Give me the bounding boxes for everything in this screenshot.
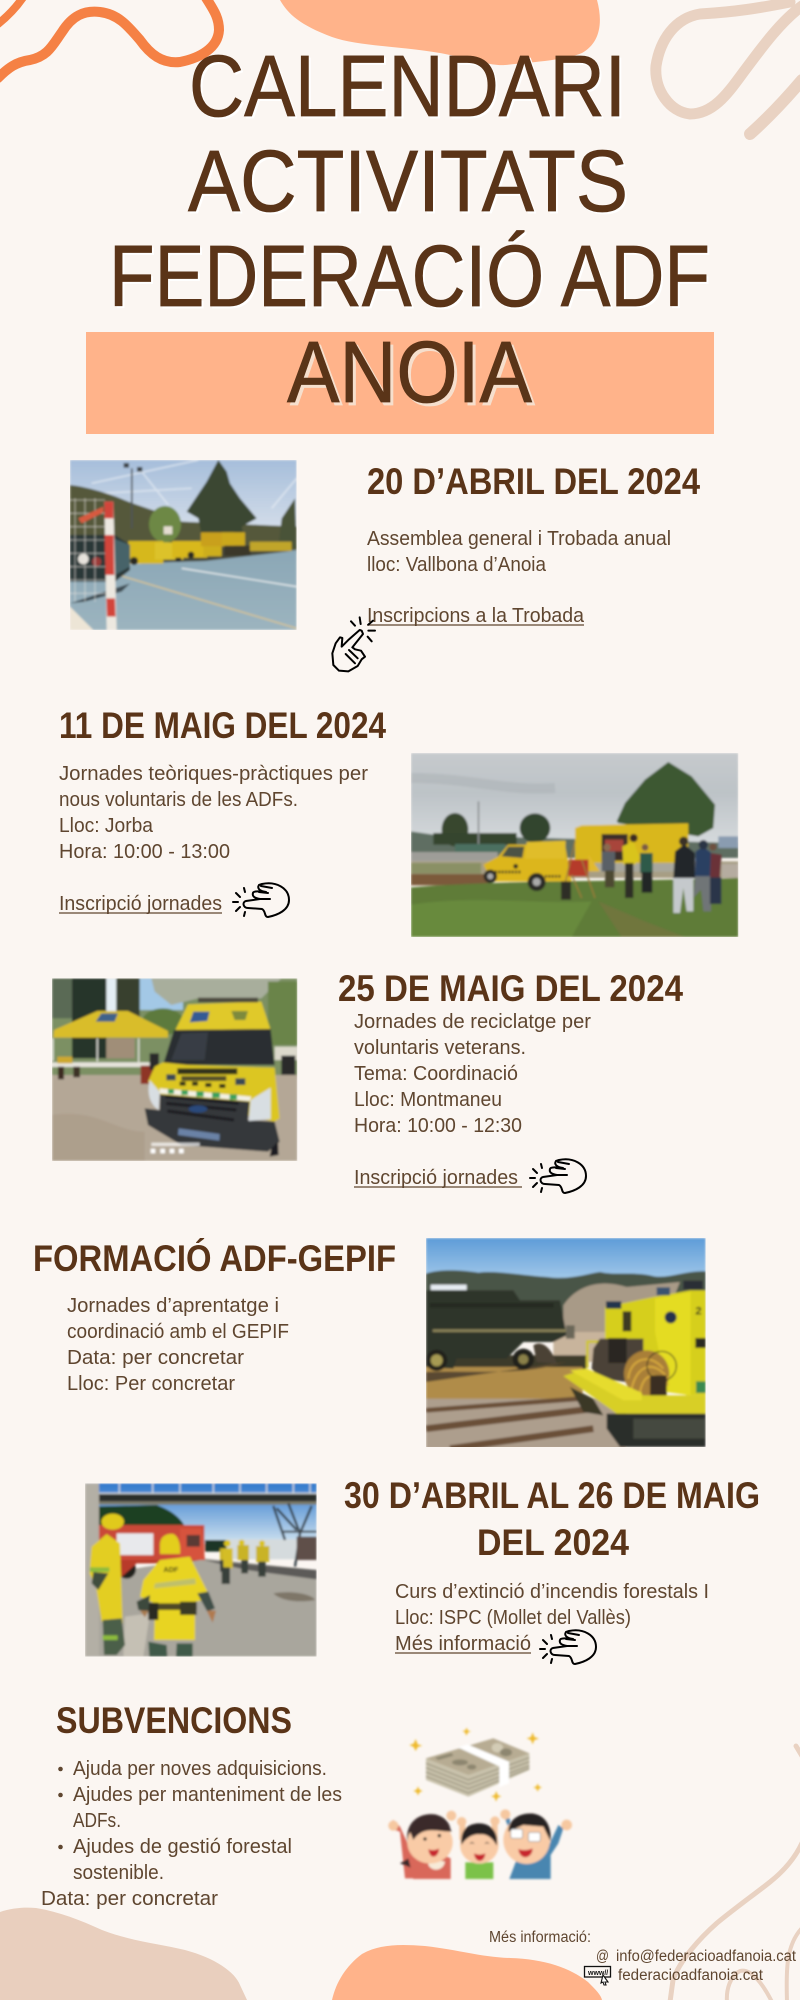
text block: jornades de reciclatge: Lloc: Montmaneu: [354, 1089, 502, 1111]
title: [109, 38, 710, 325]
text block: jornades de reciclatge: Jornades de reciclatge per: [354, 1011, 591, 1033]
text: data per concretar: Data: per concretar: [41, 1888, 218, 1910]
list: subvencions: sostenible.: [73, 1862, 164, 1884]
footer: contact information: federacioadfanoia.cat: [618, 1967, 764, 1984]
text block: jornades d'aprentatge: Lloc: Per concretar: [67, 1373, 235, 1395]
heading: formació adf-gepif: FORMACIÓ ADF-GEPIF: [33, 1237, 396, 1279]
link: inscripció jornades: Inscripció jornades: [354, 1167, 518, 1189]
text block: jornades teòriques: Lloc: Jorba: [59, 815, 154, 837]
text block: assemblea: lloc: Vallbona d’Anoia: [367, 554, 547, 576]
icon: pointing hand: [540, 1630, 596, 1664]
link: més informació: Més informació: [395, 1633, 531, 1655]
decorative blob: bottom orange: [332, 1945, 602, 2000]
list: subvencions: Ajuda per noves adquisicions.: [73, 1758, 327, 1780]
decorative squiggle: top left orange: [0, 0, 219, 78]
text block: jornades teòriques: Hora: 10:00 - 13:00: [59, 841, 230, 863]
text block: curs d'extinció: Lloc: ISPC (Mollet del Vallès): [395, 1607, 631, 1629]
decorative blob: top peach: [280, 0, 600, 65]
list: subvencions: Ajudes per manteniment de les: [73, 1784, 342, 1806]
photo: fire truck beside combine harvester: 2: [695, 1306, 702, 1318]
text block: assemblea: Assemblea general i Trobada anual: [367, 528, 671, 550]
text block: jornades de reciclatge: voluntaris veterans.: [354, 1037, 526, 1059]
heading: 30 d'abril al 26 de maig: [344, 1474, 760, 1563]
icon: web address: www//: [587, 1970, 608, 1977]
text block: jornades de reciclatge: Tema: Coordinació: [354, 1063, 518, 1085]
photo: yellow trucks in field with volunteers: [411, 753, 738, 937]
photo: volunteers in yellow uniforms: [85, 1483, 317, 1657]
heading: 11 de maig: 11 DE MAIG DEL 2024: [59, 704, 386, 746]
icon: pointing hand: [233, 883, 289, 917]
footer: contact information: info@federacioadfanoia.cat: [616, 1948, 797, 1965]
text block: jornades de reciclatge: [354, 1011, 591, 1137]
footer: contact information: [489, 1929, 797, 1984]
decorative blob: bottom left beige: [0, 1908, 247, 2000]
title banner: Anoia: [86, 324, 714, 434]
photo: fire truck beside combine harvester: [426, 1238, 706, 1449]
text block: curs d'extinció: [395, 1581, 709, 1629]
list: subvencions: Ajudes de gestió forestal: [73, 1836, 292, 1858]
title: FEDERACIÓ ADF: [109, 228, 710, 325]
title banner: Anoia: ANOIA: [287, 324, 532, 421]
text block: curs d'extinció: Curs d’extinció d’incendis forestals I: [395, 1581, 709, 1603]
text block: jornades d'aprentatge: Data: per concretar: [67, 1347, 244, 1369]
icon: pointing hand: [530, 1159, 586, 1193]
icon: clicking hand: [332, 617, 375, 671]
footer: contact information: @: [596, 1948, 609, 1965]
photo: vehicles on sports court: [70, 460, 297, 630]
text block: assemblea: [367, 528, 671, 576]
list: subvencions: [58, 1758, 342, 1884]
text block: jornades teòriques: Jornades teòriques-pràctiques per: [59, 763, 368, 785]
text block: jornades d'aprentatge: Jornades d’aprentatge i: [67, 1295, 279, 1317]
heading: 30 d'abril al 26 de maig: DEL 2024: [477, 1521, 629, 1563]
heading: subvencions: SUBVENCIONS: [56, 1699, 292, 1741]
text block: jornades teòriques: nous voluntaris de les ADFs.: [59, 789, 298, 811]
title: ACTIVITATS: [188, 133, 628, 230]
photo: volunteers in yellow uniforms: ADF: [163, 1565, 179, 1574]
text block: jornades d'aprentatge: [67, 1295, 289, 1395]
footer: contact information: Més informació:: [489, 1929, 591, 1946]
heading: 20 d'abril: 20 D’ABRIL DEL 2024: [367, 460, 700, 502]
link: inscripcions a la trobada: Inscripcions a la Trobada: [367, 605, 585, 627]
text block: jornades de reciclatge: Hora: 10:00 - 12:30: [354, 1115, 522, 1137]
heading: 25 de maig: 25 DE MAIG DEL 2024: [338, 967, 683, 1009]
decorative squiggle: top right beige: [656, 2, 800, 134]
link: inscripció jornades: Inscripció jornades: [59, 893, 222, 915]
title: CALENDARI: [189, 38, 626, 135]
icon: web address: [584, 1966, 610, 1985]
text block: jornades teòriques: [59, 763, 368, 863]
text block: jornades d'aprentatge: coordinació amb el GEPIF: [67, 1321, 289, 1343]
decorative lines: bottom right beige: [670, 1746, 800, 2000]
illustration: banknotes and happy family: [388, 1728, 572, 1879]
list: subvencions: ADFs.: [73, 1810, 121, 1832]
photo: logistics van and tent: [52, 978, 297, 1161]
